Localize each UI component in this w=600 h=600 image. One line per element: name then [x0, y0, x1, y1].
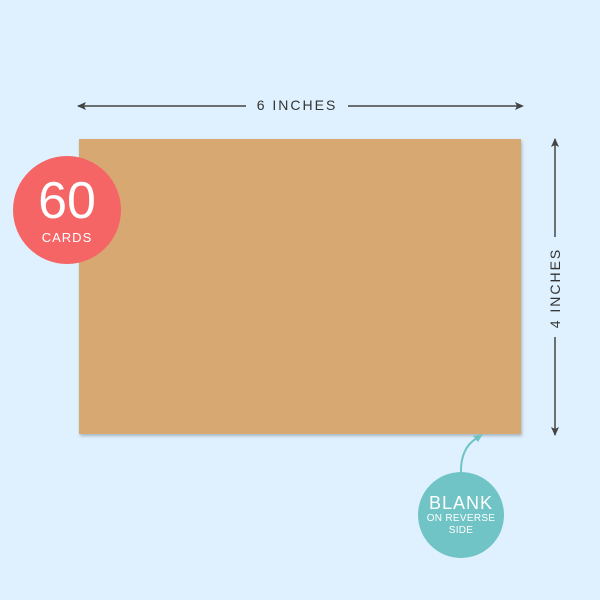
badge: blank on reverse side: BLANK — [429, 493, 493, 513]
card — [79, 139, 521, 434]
badge: blank on reverse side — [418, 472, 504, 558]
arrow: width 6 inches — [77, 97, 524, 113]
arrow: curved pointer to card — [460, 434, 483, 472]
label: 6 inches: 6 INCHES — [257, 97, 337, 113]
badge: blank on reverse side: ON REVERSE — [427, 513, 495, 524]
badge: blank on reverse side: SIDE — [449, 525, 473, 536]
badge: 60 cards — [13, 156, 121, 264]
badge: 60 cards: CARDS — [42, 230, 92, 245]
badge: 60 cards: 60 — [38, 172, 96, 230]
arrow: height 4 inches — [547, 138, 563, 436]
label: 4 inches: 4 INCHES — [547, 248, 563, 328]
